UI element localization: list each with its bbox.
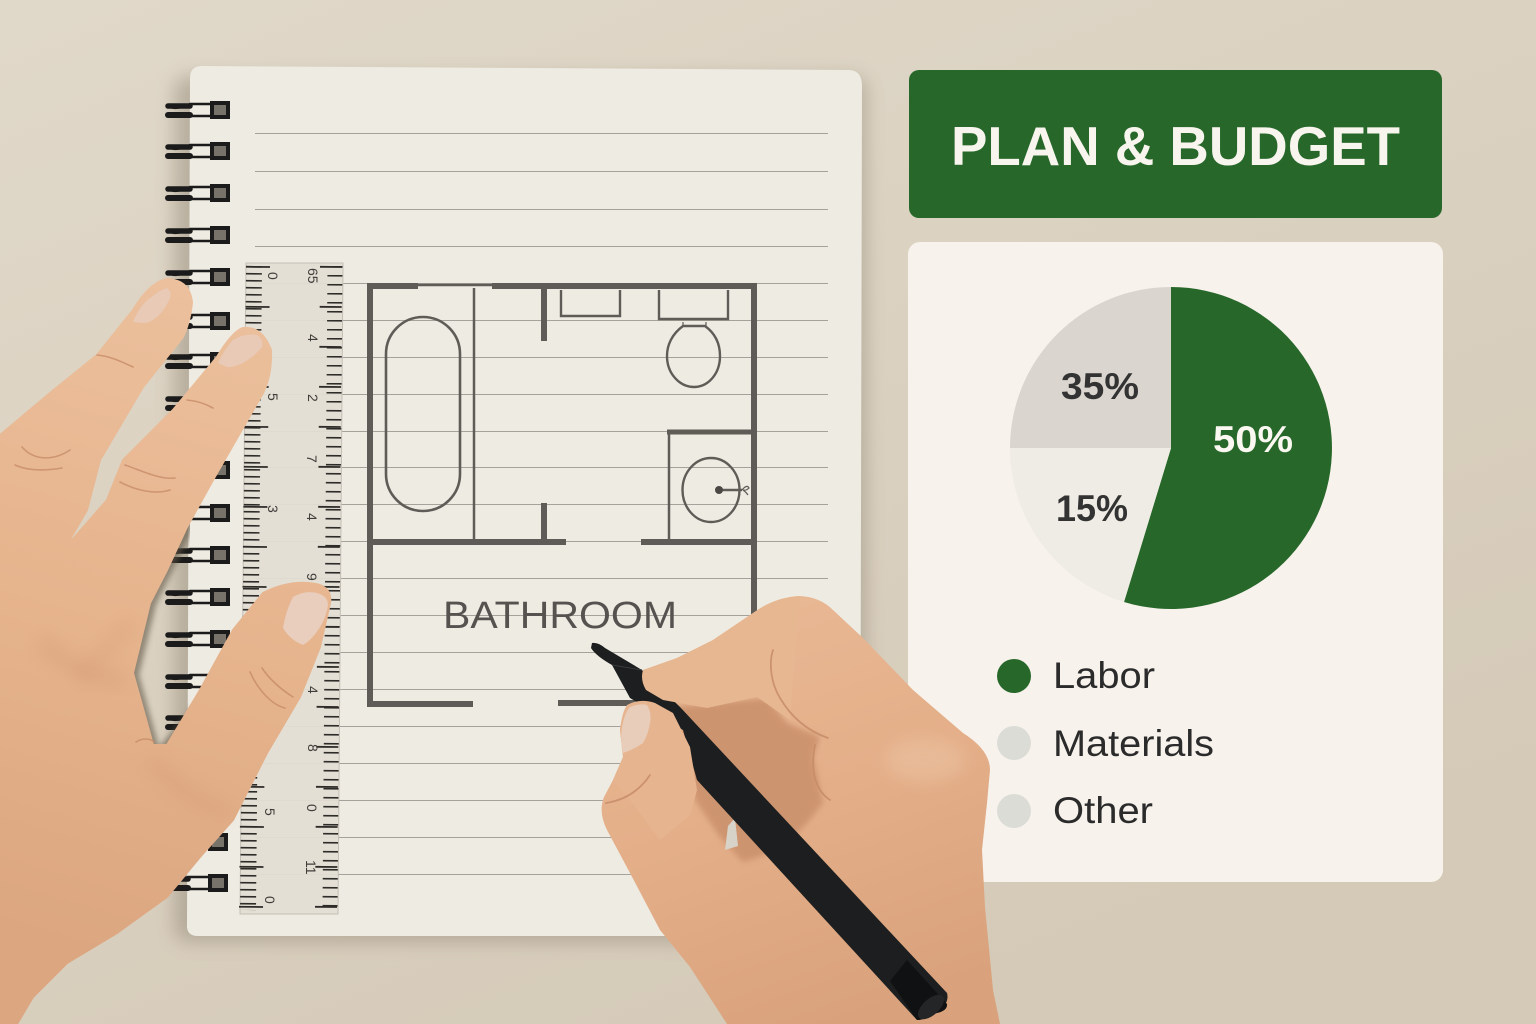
hand back (602, 596, 1000, 1024)
fingernails (133, 288, 171, 323)
bathtub (386, 317, 460, 511)
pie chart: 50% (1213, 419, 1293, 460)
ruler: 11 (303, 860, 319, 875)
right hand with pen (591, 596, 1000, 1024)
panel: budget chart (908, 242, 1443, 882)
pen (591, 643, 948, 1024)
hand inner shadow (673, 698, 823, 862)
ruler (240, 263, 343, 914)
sink (682, 458, 749, 522)
legend (997, 655, 1214, 831)
finger creases (15, 355, 293, 742)
title banner (909, 70, 1442, 218)
index finger over pen (642, 596, 800, 720)
toilet (667, 322, 720, 387)
ruler: 0 (304, 804, 320, 812)
ruler: 0 (262, 896, 278, 904)
spiral binding (166, 103, 228, 890)
title banner: PLAN & BUDGET (951, 115, 1400, 177)
thumbnail (621, 704, 651, 753)
ruler: 8 (305, 744, 321, 752)
ruler: 7 (304, 455, 320, 463)
floor plan sketch (367, 285, 757, 704)
ruler: 65 (305, 268, 321, 284)
vanity counters (561, 290, 728, 319)
thumb over pen (613, 701, 697, 840)
pie chart (1010, 287, 1332, 609)
ruler: 2 (305, 394, 321, 402)
notebook ruled lines (255, 134, 828, 874)
walls (367, 286, 757, 704)
hand shading (40, 620, 230, 810)
legend: Labor (1053, 655, 1155, 696)
ruler: 9 (304, 573, 320, 581)
ruler: 4 (305, 686, 321, 694)
ruler: 5 (262, 808, 278, 816)
ruler: 5 (265, 393, 281, 401)
right hand creases (606, 650, 830, 803)
ruler: 3 (265, 505, 281, 513)
legend: Materials (1053, 723, 1214, 764)
pie chart: 35% (1061, 366, 1139, 407)
thin partition lines (418, 285, 669, 541)
floor plan label: BATHROOM (443, 595, 677, 637)
legend: Other (1053, 790, 1153, 831)
ruler: 4 (305, 334, 321, 342)
ruler: 4 (304, 513, 320, 521)
left hand (0, 279, 330, 1024)
panel: notebook (166, 66, 866, 942)
pie chart: 15% (1056, 488, 1128, 529)
knuckle highlight (885, 738, 965, 782)
ruler: 0 (265, 272, 281, 280)
